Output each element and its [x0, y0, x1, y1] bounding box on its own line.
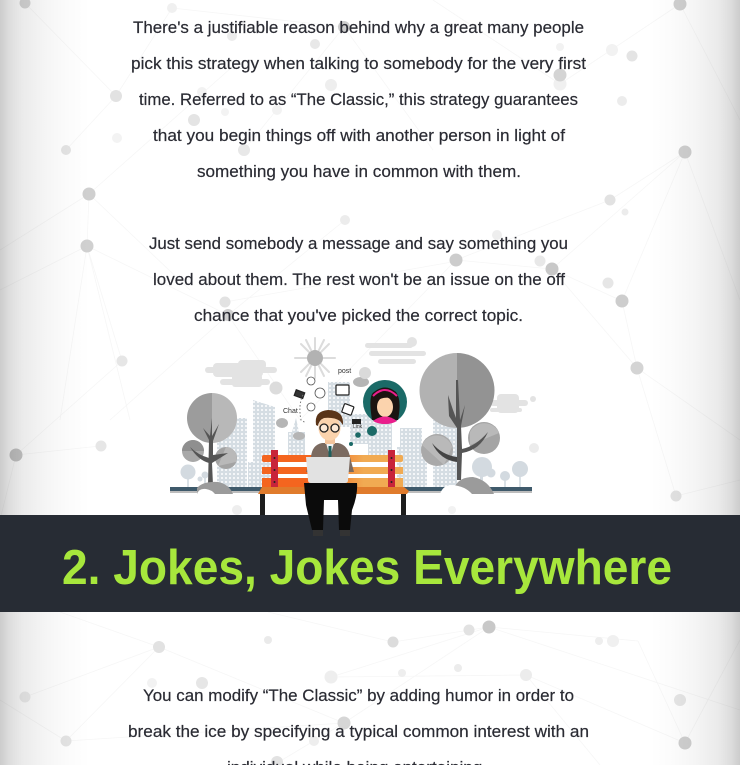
dotted connector [300, 395, 306, 423]
neck and face [325, 436, 335, 444]
social media icons [276, 367, 377, 446]
ground strip [170, 487, 532, 493]
small background trees [180, 457, 528, 487]
bench [258, 450, 409, 515]
paragraph: send a message: chance that you've picked the correct topic. [194, 306, 523, 325]
teal dots [349, 426, 377, 446]
woman avatar [363, 380, 407, 424]
paragraph: The Classic explanation: pick this strategy when talking to somebody for the very first [131, 54, 586, 73]
paragraph: adding humor [128, 686, 589, 765]
paragraph: send a message [149, 234, 568, 325]
label: Link: Link [353, 424, 363, 430]
paragraph: The Classic explanation [131, 18, 586, 181]
emoji and chat bubbles [307, 377, 325, 411]
left tree [182, 393, 237, 494]
city buildings [217, 382, 457, 487]
illustration: man on a bench in a city park [170, 337, 536, 536]
paragraph: The Classic explanation: time. Referred to as “The Classic,” this strategy guarantees [139, 90, 578, 109]
man with laptop [304, 410, 357, 536]
paragraph: adding humor: You can modify “The Classic” by adding humor in order to [143, 686, 574, 705]
legs [304, 483, 357, 530]
label: post: post [338, 368, 351, 375]
clouds [205, 337, 536, 413]
heading: Jokes, Jokes Everywhere: 2. Jokes, Jokes Everywhere [62, 541, 672, 595]
paragraph: adding humor: break the ice by specifying a typical common interest with an [128, 722, 589, 741]
heading band [0, 515, 740, 612]
camera and photo icons [294, 385, 354, 415]
paragraph: The Classic explanation: There's a justifiable reason behind why a great many people [133, 18, 584, 37]
label: Chat: Chat [283, 408, 298, 415]
paragraph: The Classic explanation: something you have in common with them. [197, 162, 521, 181]
glasses [320, 424, 339, 432]
paragraph: The Classic explanation: that you begin things off with another person in light of [153, 126, 565, 145]
link icon [352, 419, 361, 424]
right tree [420, 353, 500, 494]
grey speech bubbles [276, 367, 371, 440]
sun [295, 338, 335, 378]
laptop [306, 457, 350, 483]
torso [306, 443, 354, 472]
paragraph: send a message: loved about them. The rest won't be an issue on the off [153, 270, 565, 289]
paragraph: send a message: Just send somebody a message and say something you [149, 234, 568, 253]
